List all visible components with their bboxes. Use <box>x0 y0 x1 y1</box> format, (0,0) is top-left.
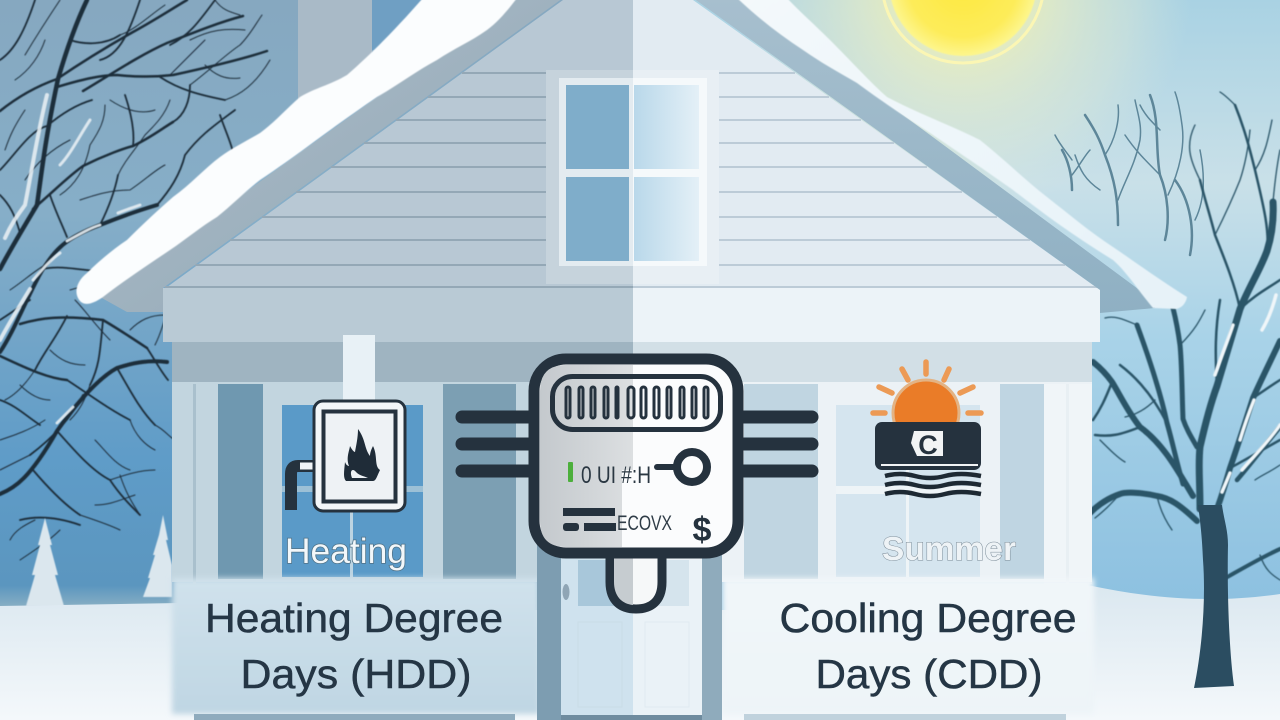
meter body <box>534 359 738 553</box>
gas pipe <box>291 466 315 510</box>
sun rays <box>873 362 981 413</box>
label: Heating: Heating <box>285 532 407 571</box>
display grille <box>552 376 720 430</box>
left bare tree <box>0 0 270 560</box>
right background trees <box>1055 92 1203 255</box>
heading: Cooling Degree Days (CDD): Days (CDD) <box>816 651 1042 697</box>
snow on left branches <box>0 95 140 423</box>
right connector lines <box>740 417 812 471</box>
icon: sun over air conditioner <box>873 362 981 496</box>
icon: furnace with flame <box>291 335 405 511</box>
flue pipe <box>343 335 375 403</box>
right porch window <box>836 405 980 577</box>
left porch window <box>282 405 423 577</box>
waves <box>885 474 981 496</box>
garbled bars <box>563 508 616 531</box>
roof band left <box>100 0 563 312</box>
snowy ground <box>0 586 1280 720</box>
left connector lines <box>462 417 535 471</box>
column grooves <box>193 384 1092 584</box>
dial <box>657 452 707 482</box>
heading: Heating Degree Days (HDD) <box>205 595 503 697</box>
lower hazy bands <box>172 578 540 714</box>
garbled small text: ECOVX <box>617 512 672 535</box>
garbled meter readout: 0 UI #:H <box>581 462 651 489</box>
icon: sun <box>733 0 1193 212</box>
door <box>537 540 722 720</box>
gable wall <box>163 0 1100 290</box>
roof snow right <box>737 0 1187 309</box>
left snowy pines <box>26 515 172 606</box>
fascia band <box>163 288 633 342</box>
porch beam <box>172 342 633 382</box>
label: Summer: Summer <box>882 530 1016 567</box>
stem <box>610 555 662 609</box>
lower wall <box>172 382 633 582</box>
chimney <box>298 0 432 100</box>
panel: winter sky on the left <box>0 0 640 610</box>
sun disc <box>892 378 960 422</box>
roof snow left <box>76 0 517 304</box>
siding lines <box>165 73 633 287</box>
right tree trunk <box>1194 505 1234 688</box>
heading: Heating Degree Days (HDD): Heating Degree <box>205 595 503 641</box>
right bare tree <box>1090 92 1280 580</box>
panel: summer sky on the right <box>640 0 1280 610</box>
gable window <box>546 70 719 284</box>
snow on right branches <box>1215 295 1280 492</box>
AC unit <box>875 422 981 470</box>
roof band right <box>693 0 1155 313</box>
AC logo <box>911 431 943 456</box>
heading: Heating Degree Days (HDD): Days (HDD) <box>240 651 472 697</box>
icon: sun over air conditioner: C <box>918 430 938 460</box>
icon: smart meter <box>462 359 812 609</box>
heading: Cooling Degree Days (CDD) <box>780 595 1076 697</box>
wall recess panels <box>218 384 1044 579</box>
heading: Cooling Degree Days (CDD): Cooling Degree <box>780 595 1076 641</box>
status indicator <box>568 462 573 482</box>
dollar sign: $ <box>693 511 712 549</box>
